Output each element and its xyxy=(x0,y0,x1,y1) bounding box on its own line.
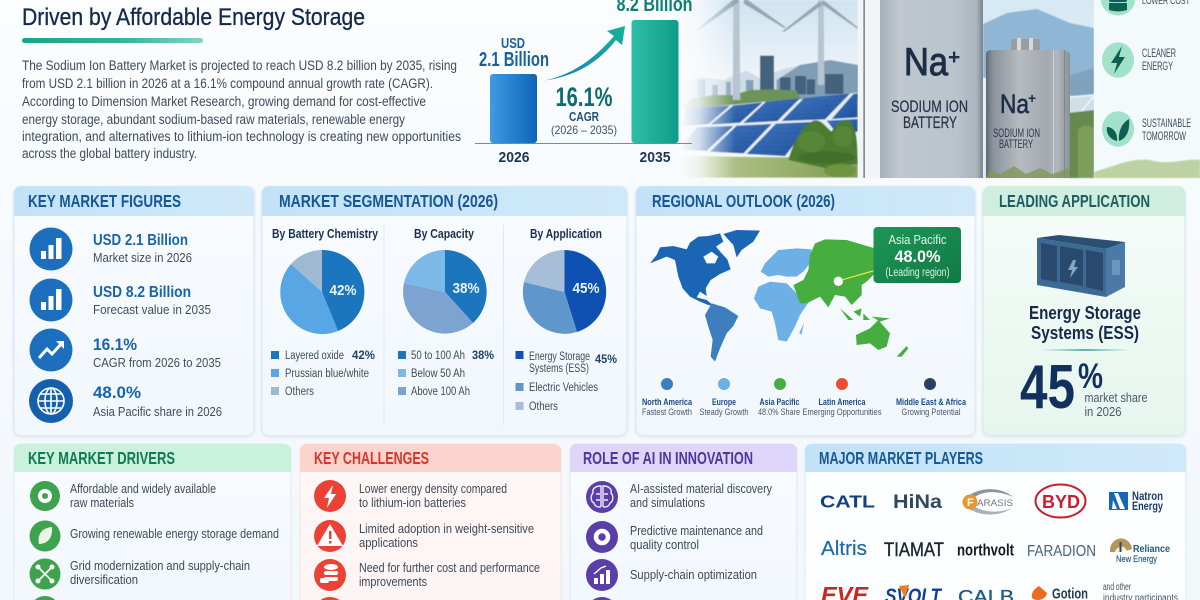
icon: storage container xyxy=(1037,235,1125,297)
intro paragraph: from USD 2.1 billion in 2026 at a 16.1% compound annual growth rate (CAGR). xyxy=(22,76,433,91)
value label 2026: USD xyxy=(501,35,525,52)
legend: 42% xyxy=(352,350,375,362)
photo: wind turbines and solar panels xyxy=(680,0,859,178)
legend xyxy=(516,351,617,413)
map legend: North America xyxy=(642,397,693,408)
bar: 2026 xyxy=(490,74,537,143)
legend: Others xyxy=(285,386,314,398)
figure: CAGR xyxy=(30,328,221,372)
challenge: energy density: to lithium-ion batteries xyxy=(359,496,466,510)
intro paragraph: integration, and alternatives to lithium-ion technology is creating new opportunities xyxy=(22,129,461,144)
stat: 45% market share: market share xyxy=(1084,390,1148,405)
benefit: cleaner energy: ENERGY xyxy=(1142,61,1173,73)
figure: market size: Market size in 2026 xyxy=(93,250,192,265)
logo: BYD xyxy=(1036,484,1086,518)
value label 2026: 2.1 Billion xyxy=(479,49,549,71)
figure: forecast value: USD 8.2 Billion xyxy=(93,284,191,301)
heading: KEY MARKET FIGURES xyxy=(28,191,181,211)
logo: Reliance New Energy: Reliance xyxy=(1133,543,1170,555)
logo: Gotion xyxy=(1032,586,1088,600)
panel: key challenges xyxy=(300,444,561,600)
AI item: predictive maintenance: Predictive maintenance and xyxy=(630,524,763,538)
intro paragraph: According to Dimension Market Research, growing demand for cost-effective xyxy=(22,94,426,109)
South America xyxy=(705,303,738,362)
title underline xyxy=(22,38,203,43)
year labels: 2026 xyxy=(498,149,530,166)
figure: market size xyxy=(30,228,192,270)
North America xyxy=(650,233,731,306)
legend xyxy=(398,350,494,398)
legend: Layered oxide xyxy=(285,350,344,362)
map legend: Growing Potential xyxy=(902,407,960,418)
legend: Below 50 Ah xyxy=(411,368,465,380)
label: ESS xyxy=(1029,303,1141,343)
solar array xyxy=(680,93,858,157)
driver: grid modernization: Grid modernization and supply-chain xyxy=(70,559,250,573)
legend: Energy Storage xyxy=(529,351,590,363)
small battery: BATTERY xyxy=(999,139,1033,151)
CAGR label: CAGR xyxy=(569,109,599,124)
callout: Asia Pacific: Asia Pacific xyxy=(888,233,946,247)
logo: HiNa: HiNa xyxy=(893,492,942,513)
panel: role of AI in innovation xyxy=(570,444,797,600)
logo: Reliance New Energy: New Energy xyxy=(1116,554,1157,564)
chart: by application: By Application xyxy=(530,227,602,241)
legend: 50 to 100 Ah xyxy=(411,350,465,362)
challenge: cost and performance xyxy=(314,559,540,591)
large battery: SODIUM ION xyxy=(891,97,968,116)
logo: northvolt: northvolt xyxy=(957,540,1014,560)
map legend: Europe xyxy=(712,397,736,408)
map legend: Steady Growth xyxy=(700,407,748,418)
map legend: Fastest Growth xyxy=(642,407,692,418)
stat: 45% market share: 45 xyxy=(1020,353,1075,422)
Africa xyxy=(754,282,808,342)
heading: REGIONAL OUTLOOK (2026) xyxy=(652,191,835,211)
legend: Above 100 Ah xyxy=(411,386,470,398)
logo: Farasis xyxy=(962,489,1013,514)
photo: sodium ion batteries xyxy=(858,0,1094,178)
panel: market segmentation xyxy=(262,186,627,436)
AI item: predictive maintenance xyxy=(586,521,763,553)
chart: by capacity: 38% xyxy=(452,280,480,297)
intro paragraph: energy storage, abundant sodium-based raw materials, renewable energy xyxy=(22,112,405,127)
year labels xyxy=(498,149,670,166)
chart: by battery chemistry: 42% xyxy=(330,282,356,299)
challenge: fourth item icon xyxy=(314,597,346,600)
legend: Others xyxy=(529,401,558,413)
driver: grid modernization: diversification xyxy=(70,573,138,587)
figure: Asia Pacific share: 48.0% xyxy=(93,383,141,402)
driver: grid modernization xyxy=(30,558,250,590)
panel: regional outlook xyxy=(636,186,975,436)
growth bar chart xyxy=(475,0,692,166)
benefit: cleaner energy xyxy=(1102,42,1176,78)
bar: 2035 xyxy=(632,20,678,143)
logo: Farasis: ARASIS xyxy=(977,498,1013,509)
callout: Asia Pacific: 48.0% xyxy=(894,247,940,266)
logo: BYD: BYD xyxy=(1042,491,1080,512)
small battery: + xyxy=(1028,90,1036,106)
large battery xyxy=(880,0,983,178)
logo: Natron Energy xyxy=(1109,491,1163,513)
chart: by application: 45% xyxy=(572,280,600,297)
benefit: sustainable tomorrow xyxy=(1102,111,1191,147)
logo: Natron Energy: Energy xyxy=(1132,501,1163,513)
driver: raw materials xyxy=(30,481,216,511)
callout: Asia Pacific: (Leading region) xyxy=(886,267,950,279)
legend xyxy=(271,350,375,398)
challenge: cost and performance: improvements xyxy=(359,575,427,589)
heading: LEADING APPLICATION xyxy=(999,191,1150,211)
intro paragraph: across the global battery industry. xyxy=(22,146,197,161)
panel: leading application xyxy=(983,186,1185,436)
year labels: 2035 xyxy=(640,149,670,166)
AI item: predictive maintenance: quality control xyxy=(630,538,699,552)
map legend: Latin America xyxy=(818,397,866,408)
Asia xyxy=(793,239,875,307)
driver: raw materials: Affordable and widely available xyxy=(70,482,216,496)
chart: by battery chemistry: By Battery Chemistry xyxy=(272,227,378,241)
AI item: supply-chain: Supply-chain optimization xyxy=(630,568,757,582)
map legend: Emerging Opportunities xyxy=(802,407,882,418)
chart: by battery chemistry xyxy=(271,227,378,398)
arrow: growth xyxy=(544,26,625,80)
figure: CAGR: CAGR from 2026 to 2035 xyxy=(93,355,221,370)
legend: Prussian blue/white xyxy=(285,368,369,380)
note: other participants xyxy=(1103,582,1178,600)
legend: 45% xyxy=(595,354,617,366)
figure: forecast value xyxy=(30,278,211,322)
label: ESS: Systems (ESS) xyxy=(1031,323,1139,343)
challenge: energy density xyxy=(314,480,507,512)
map legend: Middle East & Africa xyxy=(896,397,967,408)
distant trees xyxy=(680,89,800,110)
large battery: Na xyxy=(904,41,948,84)
small battery: SODIUM ION xyxy=(993,128,1040,140)
logo: TIAMAT: TIAMAT xyxy=(884,540,944,561)
panel: key market drivers xyxy=(14,444,291,600)
challenge: weight-sensitive adoption xyxy=(314,520,534,552)
benefits column xyxy=(1094,0,1200,178)
figure: Asia Pacific share xyxy=(29,379,222,423)
logo: Altris: Altris xyxy=(821,538,867,560)
large battery: BATTERY xyxy=(903,113,957,132)
stat: 45% market share xyxy=(1020,353,1148,422)
AI item: material discovery: and simulations xyxy=(630,496,705,510)
world map xyxy=(650,230,908,362)
CAGR label xyxy=(551,82,617,137)
driver: raw materials: raw materials xyxy=(70,496,134,510)
chart: by capacity xyxy=(398,227,494,398)
AI item: material discovery: AI-assisted material discovery xyxy=(630,482,773,496)
small battery: Na xyxy=(1000,89,1030,119)
map legend: Asia Pacific xyxy=(760,397,800,408)
stat: 45% market share: in 2026 xyxy=(1084,404,1122,419)
AI item: fourth icon xyxy=(586,597,618,600)
AI item: material discovery xyxy=(586,481,773,513)
heading: KEY MARKET DRIVERS xyxy=(28,448,175,468)
figure: market size: USD 2.1 Billion xyxy=(93,232,188,249)
panel: key market figures xyxy=(14,186,254,436)
heading: MAJOR MARKET PLAYERS xyxy=(819,448,983,468)
figure: forecast value: Forecast value in 2035 xyxy=(93,302,211,317)
chart: by capacity: By Capacity xyxy=(414,227,474,241)
large battery: + xyxy=(948,46,960,69)
intro paragraph xyxy=(22,58,461,161)
turbines xyxy=(733,0,824,100)
benefit: lower cost xyxy=(1100,0,1190,16)
figure: CAGR: 16.1% xyxy=(93,335,137,354)
driver: renewable storage xyxy=(30,520,279,552)
heading: ROLE OF AI IN INNOVATION xyxy=(583,448,753,468)
logo: FARADION: FARADION xyxy=(1027,543,1096,560)
map legend: 48.0% Share xyxy=(758,407,800,418)
heading: KEY CHALLENGES xyxy=(314,448,429,468)
map legend xyxy=(642,378,967,418)
logo: Farasis: F xyxy=(967,497,974,509)
value label 2026 xyxy=(479,35,549,71)
intro paragraph: The Sodium Ion Battery Market is projected to reach USD 8.2 billion by 2035, rising xyxy=(22,58,457,73)
heading: MARKET SEGMENTATION (2026) xyxy=(279,191,498,211)
stat: 45% market share: % xyxy=(1078,357,1103,396)
challenge: cost and performance: Need for further cost and performance xyxy=(359,561,540,575)
CAGR label: (2026 – 2035) xyxy=(551,123,617,137)
callout: Asia Pacific xyxy=(874,227,961,283)
benefit: cleaner energy: CLEANER xyxy=(1142,48,1176,60)
CAGR label: 16.1% xyxy=(556,82,612,112)
title: Driven by Affordable Energy Storage xyxy=(22,4,365,31)
logo: CATL: CATL xyxy=(820,492,875,512)
legend: Electric Vehicles xyxy=(529,382,598,394)
Europe xyxy=(761,248,812,277)
chart: by application xyxy=(516,227,617,413)
challenge: weight-sensitive adoption: applications xyxy=(359,536,418,550)
figure: Asia Pacific share: Asia Pacific share in 2026 xyxy=(93,404,222,419)
panel: major market players xyxy=(805,444,1186,600)
logo: Natron Energy: Natron xyxy=(1132,491,1163,503)
driver: fourth item icon xyxy=(30,596,60,600)
AI item: supply-chain xyxy=(586,559,757,591)
challenge: weight-sensitive adoption: Limited adoption in weight-sensitive xyxy=(359,522,534,536)
legend: Systems (ESS) xyxy=(529,363,589,375)
Australia xyxy=(856,320,890,350)
challenge: energy density: Lower energy density compared xyxy=(359,482,507,496)
logo: Reliance New Energy xyxy=(1110,538,1170,564)
small battery xyxy=(986,38,1070,178)
driver: renewable storage: Growing renewable energy storage demand xyxy=(70,527,279,541)
grass xyxy=(680,156,858,178)
shrub xyxy=(788,120,858,177)
legend: 38% xyxy=(472,350,494,362)
skyline xyxy=(697,79,753,98)
label: ESS: Energy Storage xyxy=(1029,303,1141,323)
note: other participants: and other xyxy=(1103,582,1131,593)
